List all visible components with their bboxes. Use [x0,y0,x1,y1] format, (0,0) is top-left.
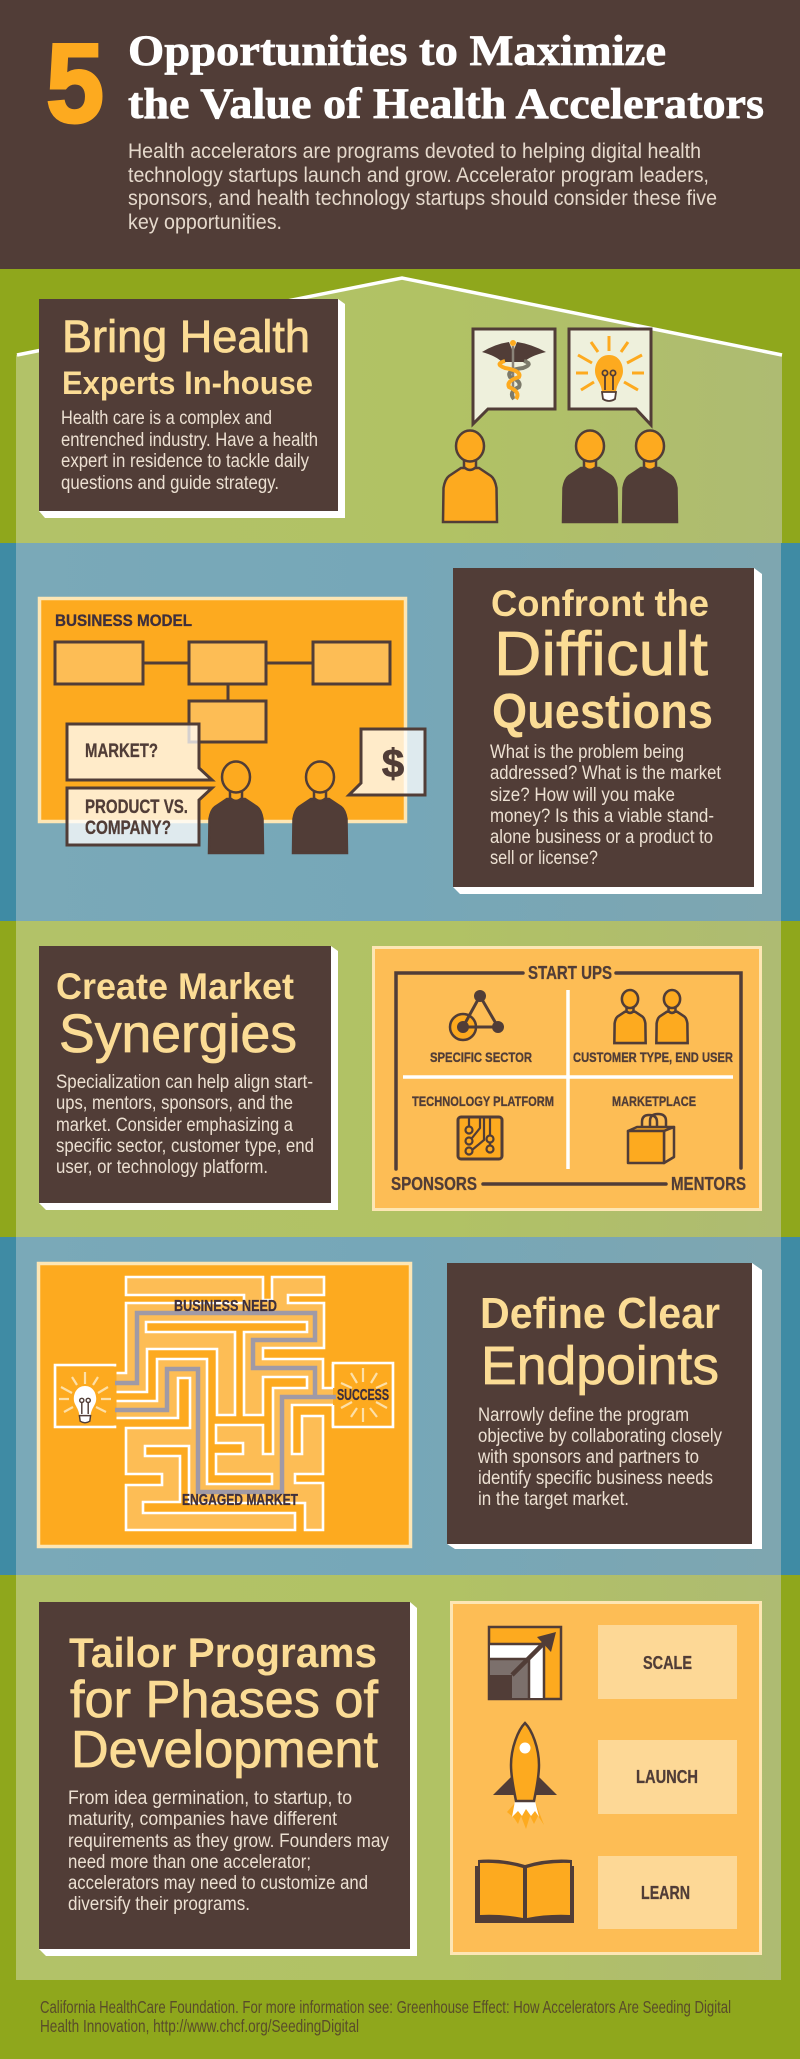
maze labels: SUCCESS [337,1387,389,1404]
person: health expert [443,430,497,522]
body text [477,1405,722,1510]
icon: rocket [493,1723,557,1829]
panel: bring health experts in-house [39,299,345,518]
maze labels [174,1298,389,1509]
body text: diversify their programs. [68,1894,250,1915]
heading [480,1289,720,1396]
person [209,762,263,853]
body text: user, or technology platform. [56,1157,268,1178]
body text: with sponsors and partners to [477,1447,699,1468]
icon: lightbulb start [59,1372,111,1423]
panel: define clear endpoints [447,1263,762,1549]
body text: expert in residence to tackle daily [61,451,309,472]
heading: bring health experts: Experts In-house [62,365,313,401]
panel: market synergies matrix [374,948,760,1210]
heading: Define Clear [480,1289,720,1338]
maze labels: BUSINESS NEED [174,1298,277,1315]
axis labels: START UPS [528,963,612,983]
heading: bring health experts: Bring Health [62,311,310,362]
body text [56,1072,314,1178]
body text: sell or license? [490,848,598,869]
title: Opportunities to Maximize [128,28,666,75]
quadrant labels: CUSTOMER TYPE, END USER [573,1050,733,1065]
quadrant dividers [403,990,733,1169]
quadrant labels [412,1050,733,1109]
matrix frame [396,973,741,1184]
body text: size? How will you make [490,785,675,806]
title: the Value of Health Accelerators [128,81,764,128]
icon: scale chart [489,1627,561,1699]
icon: open book [475,1860,574,1923]
heading [491,583,713,739]
body text: market. Consider emphasizing a [56,1115,293,1136]
speech bubble: dollar [349,729,425,795]
heading: Questions [492,685,713,739]
intro paragraph: technology startups launch and grow. Accelerator program leaders, [128,164,709,187]
body text: Specialization can help align start- [56,1072,313,1093]
panel: phases [452,1602,760,1954]
body text: identify specific business needs [478,1468,713,1489]
heading: bring health experts [62,311,313,401]
speech bubble: product vs company [67,788,212,845]
speech bubble: product vs company: COMPANY? [85,818,171,839]
heading: Difficult [494,620,708,689]
person: founder [623,430,677,522]
heading: Confront the [491,583,709,624]
body text: accelerators may need to customize and [68,1873,368,1894]
heading: Create Market [56,966,294,1007]
body text: entrenched industry. Have a health [61,430,318,451]
icon: shopping bag [628,1114,674,1163]
axis labels: SPONSORS [391,1174,477,1194]
icon: network [450,990,504,1040]
footer credit [40,1997,731,2036]
illustration: experts with speech bubbles [443,329,677,522]
big number 5: 5 [46,21,104,146]
body text: objective by collaborating closely [478,1426,722,1447]
body text [490,742,722,869]
icon: lightbulb bubble [569,329,651,425]
body text: Narrowly define the program [478,1405,689,1426]
body text: in the target market. [478,1489,629,1510]
panel: tailor programs [39,1602,417,1956]
label: launch [598,1740,737,1814]
label: business model: BUSINESS MODEL [55,611,192,630]
body text [68,1788,389,1915]
panel: create market synergies [39,946,338,1210]
body text: need more than one accelerator; [68,1852,311,1873]
body text: From idea germination, to startup, to [68,1788,352,1809]
intro paragraph: Health accelerators are programs devoted to helping digital health [128,140,701,163]
speech bubble: product vs company: PRODUCT VS. [85,797,188,818]
quadrant labels: SPECIFIC SECTOR [430,1050,532,1065]
heading: Tailor Programs [69,1629,377,1676]
body text: questions and guide strategy. [61,473,279,494]
heading: Development [71,1721,379,1779]
flow chart [55,642,390,742]
person [293,762,347,853]
label: launch: LAUNCH [636,1766,698,1787]
title [128,28,764,128]
label: scale [598,1625,737,1699]
speech bubble: market: MARKET? [85,741,158,762]
body text: money? Is this a viable stand- [490,806,714,827]
person: founder [563,430,617,522]
intro paragraph: sponsors, and health technology startups should consider these five [128,187,717,210]
body text: ups, mentors, sponsors, and the [56,1093,293,1114]
body text: maturity, companies have different [68,1809,338,1830]
maze solution path [115,1313,336,1492]
footer credit: Health Innovation, http://www.chcf.org/SeedingDigital [40,2016,359,2036]
maze corridors [55,1277,393,1530]
body text: Health care is a complex and [61,408,272,429]
icon: caduceus bubble [473,329,555,424]
speech bubble: market [67,724,212,780]
body text [61,408,318,494]
intro paragraph: key opportunities. [128,211,282,234]
heading: for Phases of [70,1671,379,1729]
axis labels [391,963,746,1194]
body text: alone business or a product to [490,827,713,848]
panel: confront the difficult questions [453,568,762,894]
icon: two customers [614,990,688,1043]
maze labels: ENGAGED MARKET [182,1492,298,1509]
heading [56,966,297,1064]
intro paragraph [128,140,717,234]
body text: addressed? What is the market [490,763,722,784]
heading [69,1629,379,1779]
label: learn: LEARN [641,1882,690,1903]
icon: circuit chip [458,1117,502,1159]
body text: What is the problem being [490,742,684,763]
axis labels: MENTORS [671,1174,746,1194]
label: scale: SCALE [643,1652,692,1673]
start box [56,1366,116,1426]
body text: specific sector, customer type, end [56,1136,314,1157]
label: learn [598,1856,737,1929]
quadrant labels: TECHNOLOGY PLATFORM [412,1094,554,1109]
panel: maze [38,1264,410,1546]
finish box [333,1364,392,1426]
heading: Endpoints [481,1336,719,1396]
header band [0,0,800,269]
body text: requirements as they grow. Founders may [68,1831,389,1852]
heading: Synergies [59,1004,297,1064]
quadrant labels: MARKETPLACE [612,1094,696,1109]
success rays [341,1368,387,1422]
panel: business model chart [40,598,425,853]
speech bubble: dollar: $ [382,742,404,786]
